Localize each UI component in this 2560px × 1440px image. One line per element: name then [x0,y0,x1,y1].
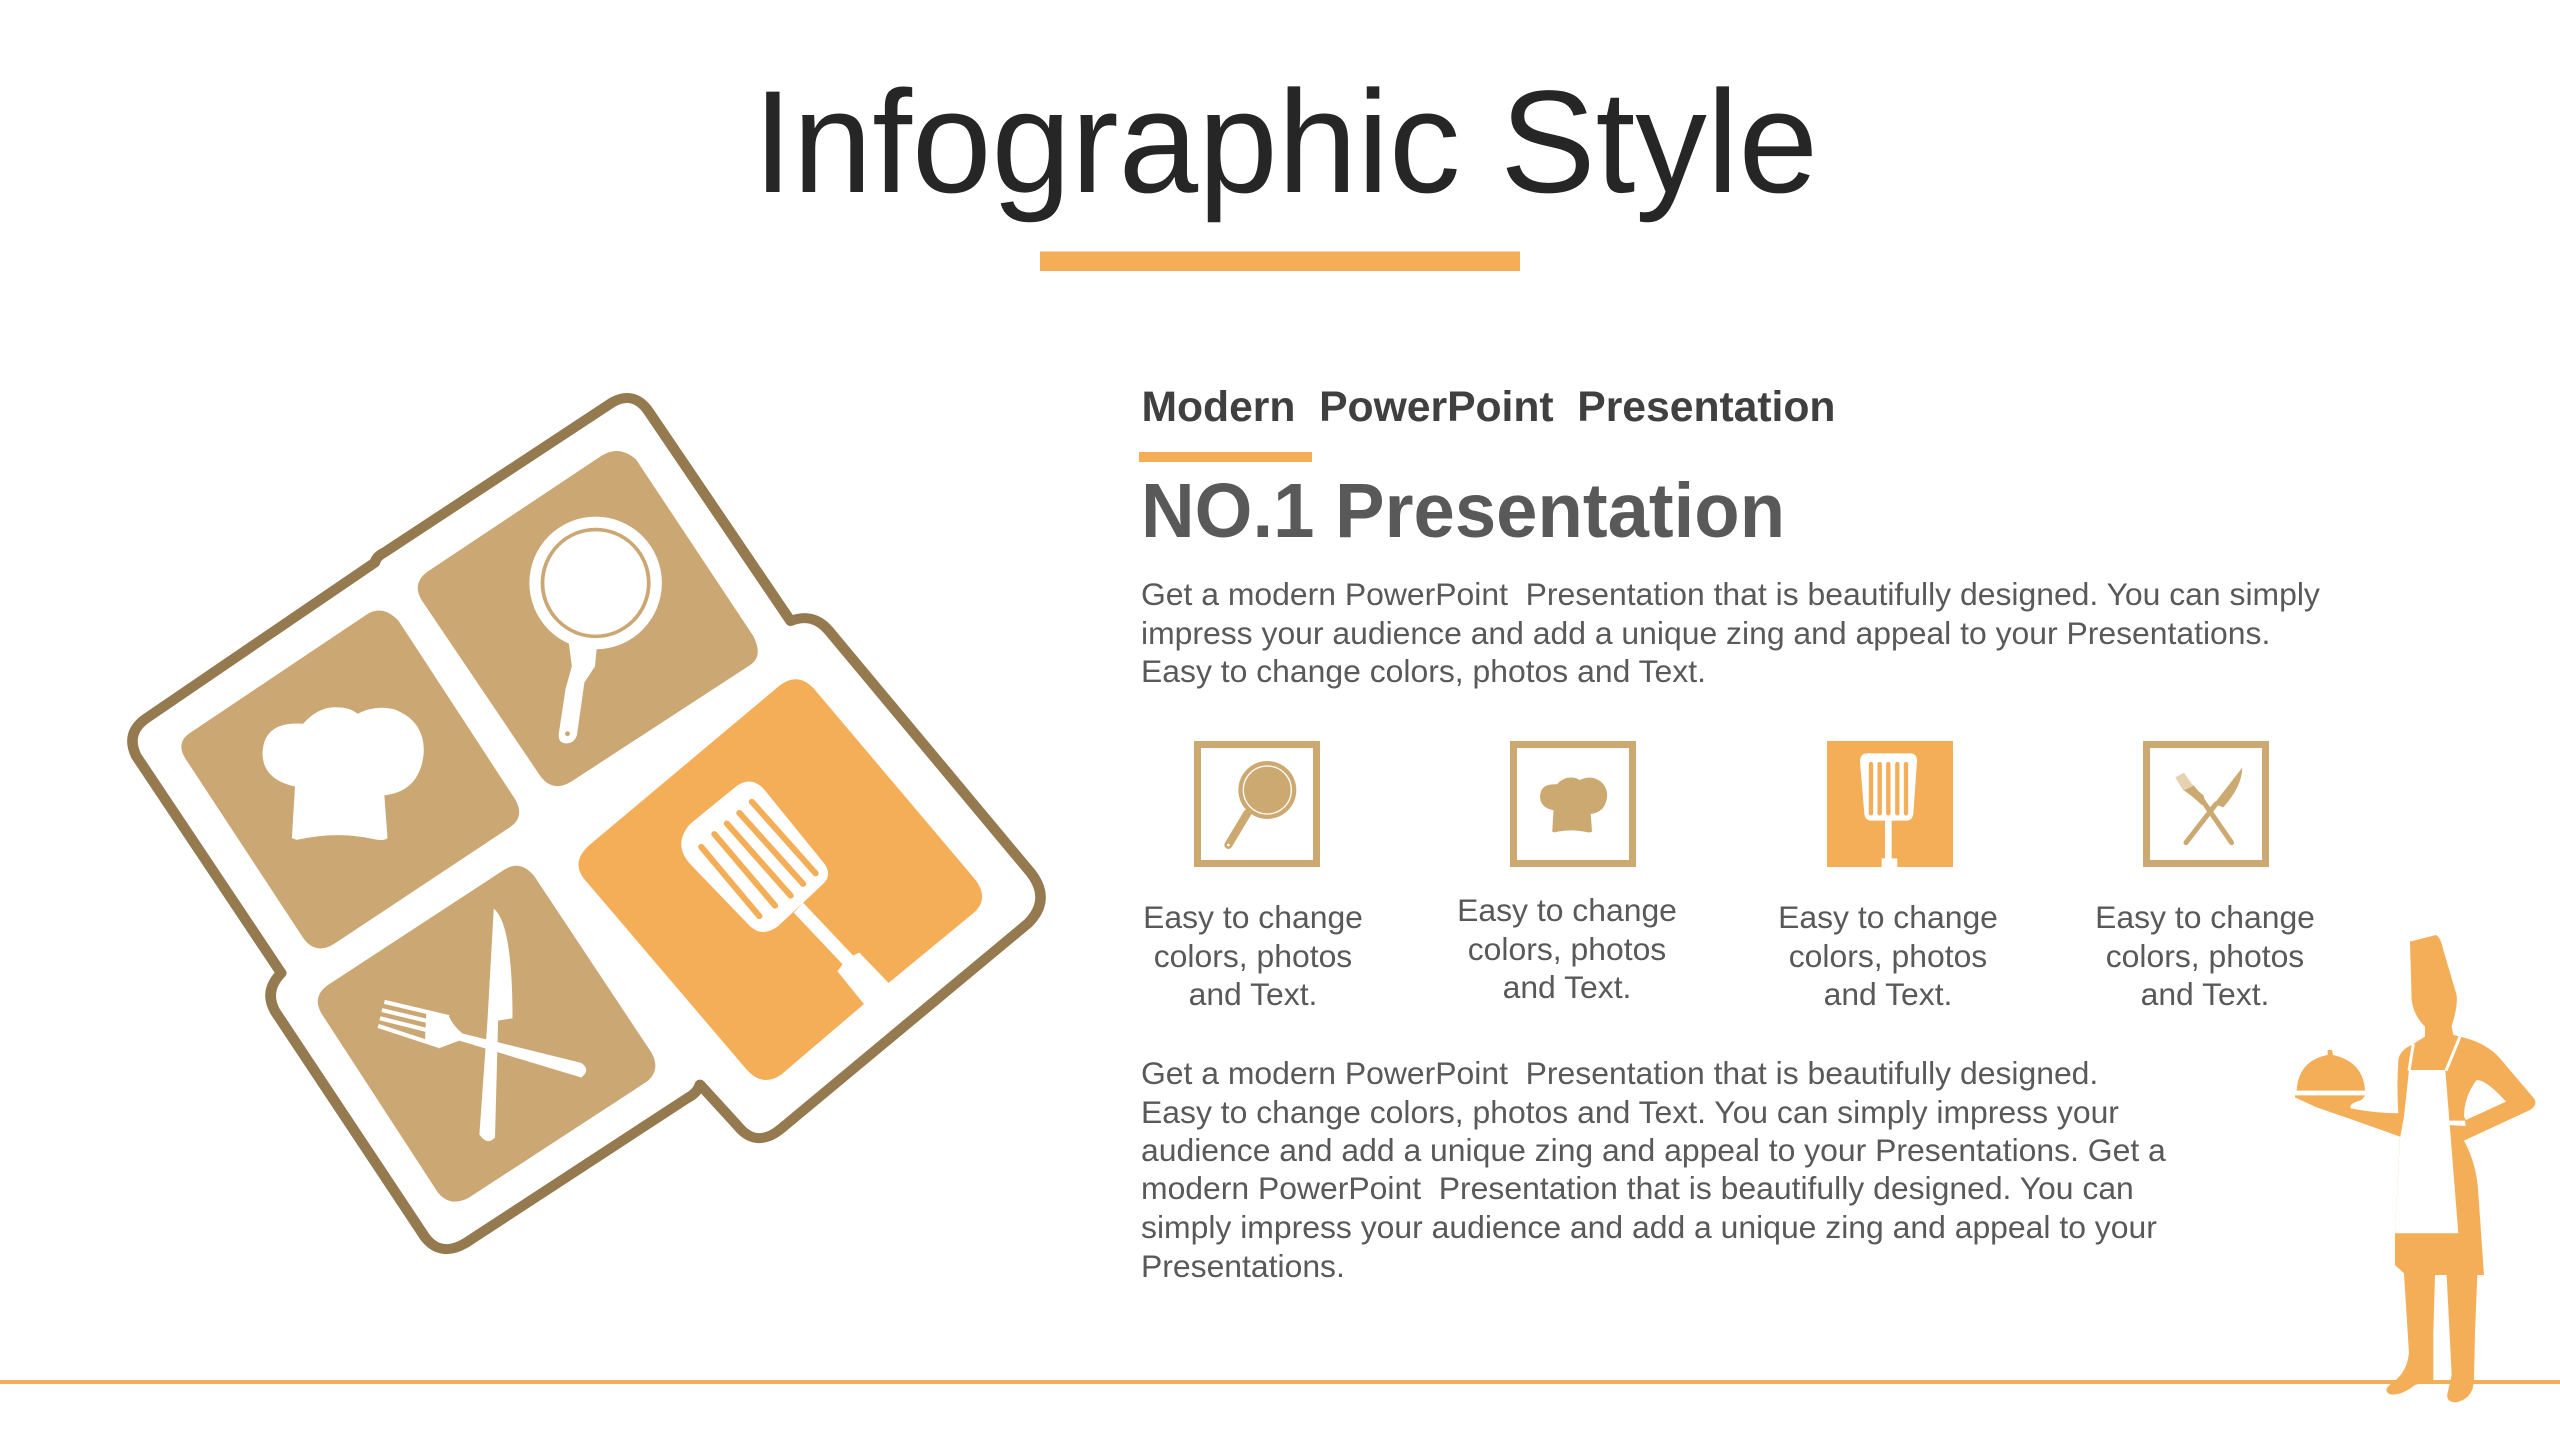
caption 2: colors, photos [1468,931,1666,967]
intro paragraph: Easy to change colors, photos and Text. [1141,653,1706,689]
lower paragraph: Get a modern PowerPoint Presentation that is beautifully designed. [1141,1055,2098,1091]
caption 4 [2095,899,2315,1012]
subheading underline [1139,452,1312,462]
caption 3: Easy to change [1778,899,1998,935]
heading: NO.1 Presentation [1141,468,1785,554]
caption 3 [1778,899,1998,1012]
caption 3: colors, photos [1789,938,1987,974]
serving cloche [2297,1050,2365,1091]
tile: fork and knife [318,866,655,1202]
caption 1: and Text. [1189,976,1317,1012]
apron [2395,1037,2506,1233]
main tile illustration [132,398,1041,1249]
caption 4: colors, photos [2106,938,2304,974]
lower paragraph: audience and add a unique zing and appeal to your Presentations. Get a [1141,1132,2166,1168]
intro paragraph: Get a modern PowerPoint Presentation that is beautifully designed. You can simply [1141,576,2320,612]
caption 2: and Text. [1503,969,1631,1005]
lower paragraph: simply impress your audience and add a unique zing and appeal to your [1141,1209,2157,1245]
caption 4: Easy to change [2095,899,2315,935]
title underline [1040,252,1520,271]
icon: fork and knife box [2146,744,2266,864]
tile outline [132,398,1041,1249]
icon: spatula box [1827,741,1953,867]
lower paragraph: Presentations. [1141,1248,1345,1284]
caption 2 [1457,892,1677,1005]
caption 1: colors, photos [1154,938,1352,974]
icon: frying pan box [1198,744,1316,864]
caption 4: and Text. [2141,976,2269,1012]
tile: chef hat [181,611,519,948]
lower paragraph: Easy to change colors, photos and Text. You can simply impress your [1141,1094,2119,1130]
footer line [0,1380,2560,1384]
title: Infographic Style [753,60,1818,223]
tile: spatula (highlighted) [578,679,982,1080]
caption 3: and Text. [1824,976,1952,1012]
caption 2: Easy to change [1457,892,1677,928]
chef silhouette [2295,935,2535,1402]
tile: frying pan [418,451,758,786]
lower paragraph [1141,1055,2166,1284]
caption 1 [1143,899,1363,1012]
subheading: Modern PowerPoint Presentation [1142,383,1836,431]
icon: chef hat box [1514,744,1632,864]
caption 1: Easy to change [1143,899,1363,935]
chef body [2295,935,2535,1402]
lower paragraph: modern PowerPoint Presentation that is beautifully designed. You can [1141,1170,2134,1206]
intro paragraph: impress your audience and add a unique zing and appeal to your Presentations. [1141,615,2270,651]
intro paragraph [1141,576,2320,689]
